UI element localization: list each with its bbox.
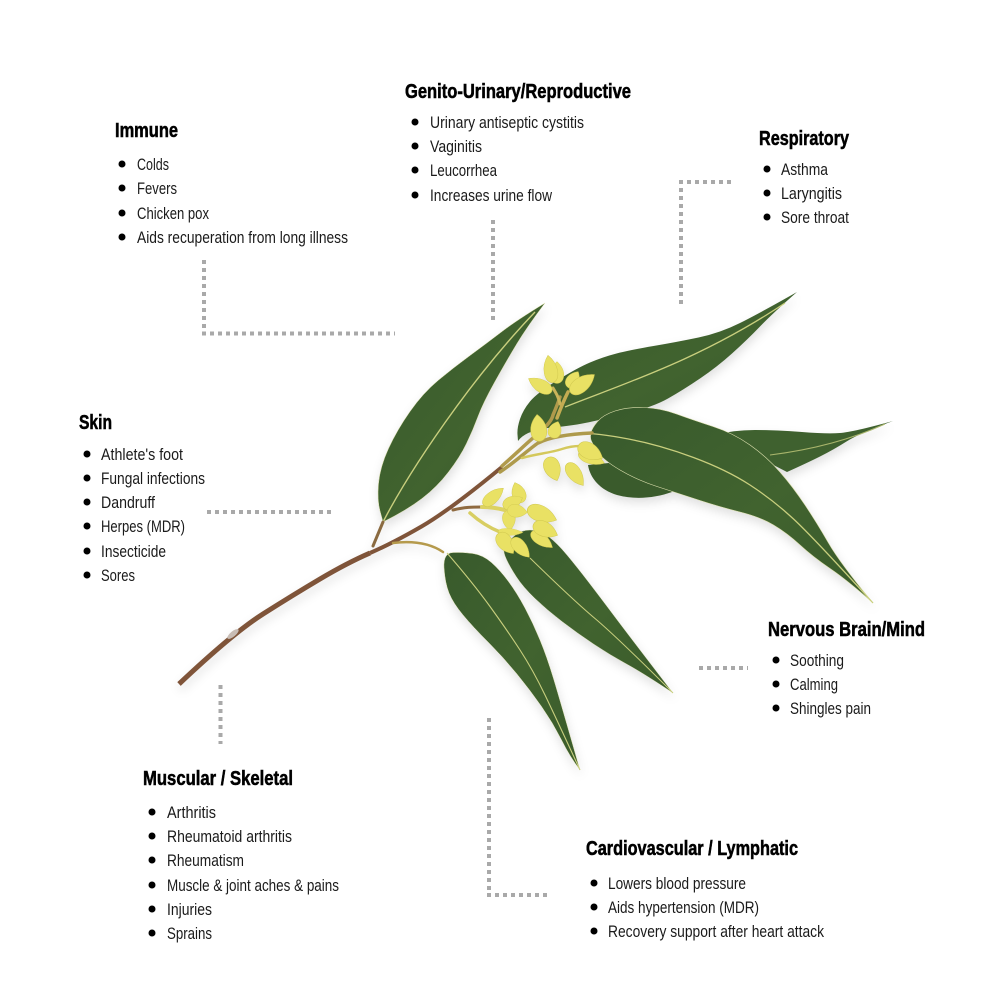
- stem pale patch: [226, 628, 240, 640]
- list: muscular: Rheumatism: [167, 852, 244, 870]
- connector: respiratory: [679, 180, 735, 304]
- list: skin: Insecticide: [101, 543, 166, 561]
- leaf: under lobe: [588, 460, 672, 498]
- list: muscular: [148, 804, 339, 943]
- connector: skin: [207, 510, 331, 514]
- connector: muscular: [218, 685, 222, 744]
- buds: [480, 354, 607, 562]
- list: skin: Sores: [101, 567, 135, 585]
- list: muscular: Sprains: [167, 925, 212, 943]
- leaf: upper right: [517, 292, 797, 441]
- panel: immune: [115, 120, 348, 247]
- panel: nervous brain/mind: [768, 619, 925, 718]
- list: nervous: [772, 652, 871, 718]
- list: genito-urinary: Urinary antiseptic cystitis: [430, 114, 584, 132]
- list: skin: Dandruff: [101, 494, 155, 512]
- list: nervous: Calming: [790, 676, 838, 694]
- leaf: lower: [444, 552, 580, 770]
- heading: nervous: Nervous Brain/Mind: [768, 619, 925, 641]
- leaf: upper left: [378, 303, 545, 522]
- list: nervous: Soothing: [790, 652, 844, 670]
- panel: skin: [79, 412, 205, 585]
- list: skin: Fungal infections: [101, 470, 205, 488]
- list: muscular: Arthritis: [167, 804, 216, 822]
- heading: immune: Immune: [115, 120, 178, 142]
- list: immune: Aids recuperation from long illness: [137, 229, 348, 247]
- leaf: far right: [715, 421, 893, 472]
- leaf: main right: [578, 407, 873, 603]
- list: genito-urinary: [412, 114, 584, 205]
- connector: nervous: [699, 666, 748, 670]
- branches and peduncles: [373, 388, 592, 552]
- heading: skin: Skin: [79, 412, 112, 434]
- stem: [179, 467, 502, 684]
- list: respiratory: [764, 161, 849, 227]
- list: genito-urinary: Increases urine flow: [430, 187, 552, 205]
- list: genito-urinary: Vaginitis: [430, 138, 482, 156]
- heading: cardiovascular: Cardiovascular / Lymphatic: [586, 838, 798, 860]
- list: immune: Chicken pox: [137, 205, 210, 223]
- heading: respiratory: Respiratory: [759, 128, 850, 150]
- illustration: eucalyptus branch: [179, 292, 893, 770]
- list: skin: Athlete's foot: [101, 446, 183, 464]
- list: muscular: Injuries: [167, 901, 212, 919]
- list: cardiovascular: [590, 875, 825, 941]
- list: immune: Colds: [137, 156, 169, 174]
- list: respiratory: Sore throat: [781, 209, 849, 227]
- list: genito-urinary: Leucorrhea: [430, 162, 498, 180]
- leaf: lower centre: [504, 530, 673, 693]
- panel: muscular / skeletal: [143, 768, 339, 943]
- list: respiratory: Laryngitis: [781, 185, 842, 203]
- list: immune: [118, 156, 348, 247]
- connector: immune: [202, 260, 395, 334]
- list: nervous: Shingles pain: [790, 700, 871, 718]
- heading: muscular: Muscular / Skeletal: [143, 768, 293, 790]
- list: cardiovascular: Recovery support after heart attack: [608, 923, 825, 941]
- connector: cardiovascular: [487, 718, 547, 895]
- panel: cardiovascular / lymphatic: [586, 838, 825, 941]
- heading: genito-urinary: Genito-Urinary/Reproductive: [405, 81, 631, 103]
- list: skin: Herpes (MDR): [101, 518, 185, 536]
- list: cardiovascular: Lowers blood pressure: [608, 875, 746, 893]
- connector: genito-urinary: [491, 220, 495, 320]
- list: cardiovascular: Aids hypertension (MDR): [608, 899, 759, 917]
- list: respiratory: Asthma: [781, 161, 829, 179]
- list: immune: Fevers: [137, 180, 177, 198]
- list: skin: [84, 446, 205, 585]
- panel: genito-urinary / reproductive: [405, 81, 631, 205]
- list: muscular: Muscle & joint aches & pains: [167, 877, 339, 895]
- list: muscular: Rheumatoid arthritis: [167, 828, 292, 846]
- panel: respiratory: [759, 128, 850, 227]
